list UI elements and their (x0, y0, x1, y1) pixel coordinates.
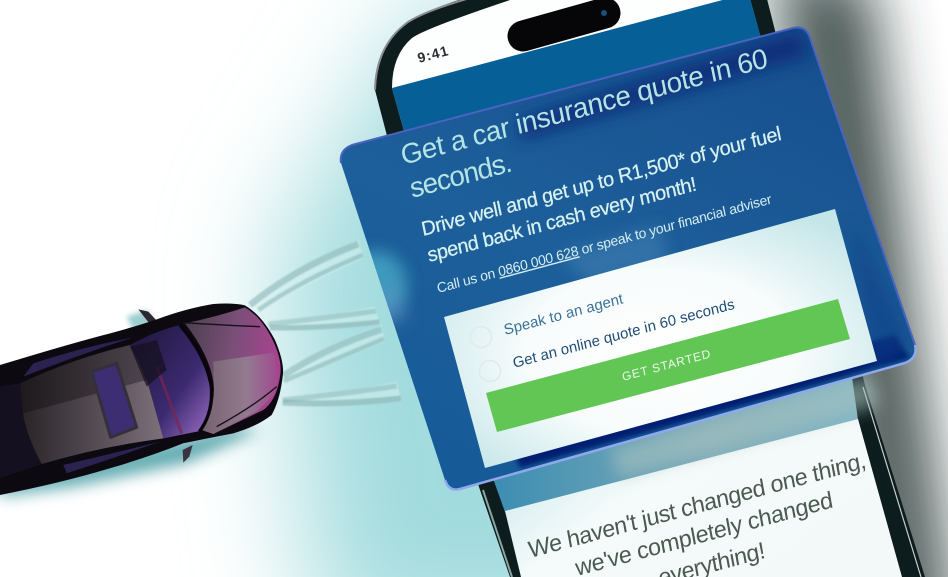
card title: Get a car insurance quote in 60 (398, 42, 770, 171)
camera dot (601, 10, 607, 16)
radio one (470, 326, 492, 348)
upper side window (23, 337, 133, 377)
card under-glow (610, 375, 880, 478)
beam three (305, 325, 385, 369)
blue screen band (392, 0, 760, 130)
status time: 9:41 (416, 42, 450, 66)
phone (375, 0, 925, 577)
sunroof (92, 363, 137, 437)
dynamic island (523, 13, 605, 36)
beam one (255, 240, 363, 306)
car (0, 304, 283, 497)
car shadow (0, 427, 260, 497)
hood crease (183, 323, 277, 427)
beam two (300, 306, 380, 328)
roof (20, 345, 163, 464)
call line: Call us on 0860 000 628 or speak to your financial adviser (435, 191, 773, 296)
card title: seconds. (407, 146, 515, 204)
lower screen panel (505, 419, 902, 577)
form panel (444, 209, 877, 468)
phone screen top (392, 0, 760, 130)
phone frame (375, 0, 925, 577)
mirror bottom (183, 445, 193, 463)
hood light facet (202, 353, 277, 434)
card glows (340, 30, 915, 468)
radio two (480, 360, 500, 382)
card top edge (341, 27, 915, 345)
background glow (212, 0, 948, 577)
windshield pillar (180, 325, 212, 432)
beam four (314, 382, 402, 404)
lower headline: We haven't just changed one thing, (526, 447, 868, 563)
shadow under mirror (127, 310, 157, 330)
windshield (130, 325, 211, 438)
rear glass (0, 383, 42, 478)
get started button (486, 299, 850, 432)
mirror top (138, 309, 157, 323)
card base (341, 27, 916, 490)
option speak to an agent: Speak to an agent (502, 290, 625, 339)
lower screen band (490, 370, 858, 512)
card bottom edge (445, 345, 916, 490)
card subtitle: Drive well and get up to R1,500* of your fuel (420, 123, 783, 241)
hood (185, 307, 281, 434)
car body (0, 304, 283, 495)
lower side window (63, 442, 160, 473)
card subtitle: spend back in cash every month! (426, 173, 699, 267)
headlight beams (248, 240, 402, 405)
button label: GET STARTED (621, 346, 712, 384)
front seat accent (157, 367, 182, 433)
quote card (340, 27, 916, 490)
roof light facet (23, 380, 163, 464)
option online quote: Get an online quote in 60 seconds (511, 296, 736, 372)
interior block (130, 340, 167, 387)
